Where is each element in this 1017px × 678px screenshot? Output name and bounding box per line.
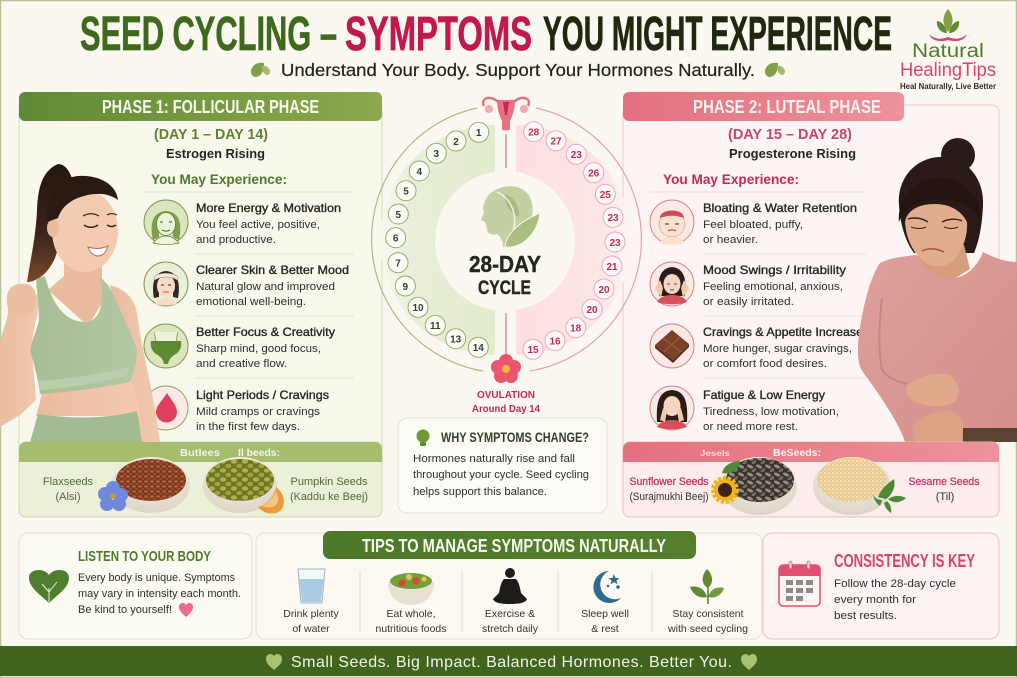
day circles: follicular: 10 bbox=[412, 303, 424, 314]
footer banner bbox=[0, 646, 1017, 676]
symptom: better focus: Sharp mind, good focus, bbox=[196, 343, 321, 355]
panel: why symptoms change: helps support this balance. bbox=[413, 486, 547, 498]
logo: Natural Healing Tips: HealingTips bbox=[900, 60, 996, 81]
sweater arm fold bbox=[879, 298, 908, 384]
panel: why symptoms change bbox=[398, 418, 607, 513]
ovulation flower bbox=[491, 354, 521, 383]
phase 1 header bbox=[19, 92, 382, 121]
day circles: luteal: 20 bbox=[586, 305, 598, 316]
panel: sunflower and sesame seeds: (Surajmukhi Beej) bbox=[630, 491, 708, 503]
symptom: better focus bbox=[144, 324, 335, 370]
illustration: woman holding stomach bbox=[858, 138, 1017, 442]
day circles: luteal: 21 bbox=[606, 262, 618, 273]
tip: sleep bbox=[581, 571, 629, 635]
tip: yoga bbox=[482, 568, 539, 635]
torso bbox=[36, 380, 141, 416]
panel: consistency is key: best results. bbox=[834, 610, 897, 622]
illustration: woman with raised fist bbox=[0, 164, 160, 442]
symptom: cravings chocolate bbox=[650, 324, 863, 370]
panel: listen to your body: LISTEN TO YOUR BODY bbox=[78, 548, 211, 565]
day range: (DAY 1 – DAY 14) bbox=[154, 126, 268, 143]
icon: light bulb bbox=[416, 430, 430, 446]
seeds section: Il beeds: bbox=[238, 448, 280, 459]
seeds section: (Kaddu ke Beej) bbox=[290, 491, 368, 503]
day circles: follicular: 7 bbox=[395, 258, 401, 270]
tip: food: Eat whole, bbox=[386, 608, 436, 620]
day circles: luteal: 23 bbox=[609, 238, 621, 249]
day circles: luteal: 23 bbox=[607, 213, 619, 224]
symptom: fatigue: Fatigue & Low Energy bbox=[703, 388, 825, 402]
symptom: cravings chocolate: More hunger, sugar cravings, bbox=[703, 343, 852, 355]
symptom: cravings chocolate: or comfort food desires. bbox=[703, 358, 827, 370]
panel: phase 2 luteal bbox=[623, 92, 999, 517]
seeds section: (Alsi) bbox=[55, 491, 81, 503]
day circles: follicular: 5 bbox=[396, 210, 402, 221]
logo: Natural Healing Tips bbox=[900, 9, 996, 91]
day circles: luteal: 23 bbox=[571, 150, 582, 161]
day circles: luteal: 27 bbox=[550, 136, 562, 148]
tips header bbox=[323, 531, 696, 559]
symptom: bloating: Bloating & Water Retention bbox=[703, 201, 857, 215]
seeds section: Butlees bbox=[180, 448, 220, 459]
symptom: fatigue: Tiredness, low motivation, bbox=[703, 406, 839, 418]
icon: pink heart bbox=[179, 603, 193, 617]
panel: why symptoms change: Hormones naturally rise and fall bbox=[413, 453, 575, 465]
uterus icon bbox=[483, 98, 529, 130]
panel: phase 1 follicular bbox=[19, 92, 382, 517]
tip: plant bbox=[667, 569, 748, 635]
panel: listen to your body: may vary in intensity each month. bbox=[78, 588, 241, 600]
tip: sleep: & rest bbox=[591, 623, 619, 635]
day circles: follicular: 9 bbox=[403, 282, 409, 293]
cycle label: 28-DAY bbox=[469, 251, 541, 277]
symptom: better focus: and creative flow. bbox=[196, 358, 287, 370]
phase 2 header bbox=[623, 92, 904, 121]
day circles: follicular: 11 bbox=[430, 321, 441, 332]
day circles: luteal bbox=[523, 122, 625, 359]
day circles: follicular: 14 bbox=[473, 343, 484, 354]
tip: yoga: Exercise & bbox=[485, 608, 535, 620]
chest and neck bbox=[48, 258, 110, 326]
tip: plant: Stay consistent bbox=[672, 608, 744, 620]
panel: why symptoms change: WHY SYMPTOMS CHANGE? bbox=[441, 429, 589, 445]
hair bbox=[47, 176, 118, 222]
seeds section: Flaxseeds bbox=[43, 476, 94, 488]
you may experience: You May Experience: bbox=[151, 171, 287, 187]
bowl: pumpkin seeds bbox=[203, 457, 284, 514]
ponytail bbox=[27, 164, 75, 282]
phase 1 header: PHASE 1: FOLLICULAR PHASE bbox=[102, 97, 319, 117]
day circles: luteal: 20 bbox=[598, 285, 610, 296]
smile and eyes bbox=[83, 214, 117, 227]
tip: food: nutritious foods bbox=[376, 623, 446, 635]
panel: listen to your body bbox=[19, 533, 252, 639]
panel: sunflower and sesame seeds: BeSeeds: bbox=[773, 448, 821, 459]
day circles: follicular: 5 bbox=[403, 186, 409, 198]
bun bbox=[941, 138, 975, 172]
ovulation label: Around Day 14 bbox=[472, 404, 540, 415]
panel: listen to your body: Every body is unique. Symptoms bbox=[78, 572, 235, 584]
symptom: mood swings: or easily irritated. bbox=[703, 296, 794, 308]
panel: tips to manage symptoms naturally bbox=[256, 531, 762, 639]
hormone label: Progesterone Rising bbox=[729, 147, 856, 161]
symptom: bloating: or heavier. bbox=[703, 234, 758, 246]
symptom: mood swings: Feeling emotional, anxious, bbox=[703, 281, 843, 293]
centre disc bbox=[435, 171, 575, 311]
symptom: more energy: and productive. bbox=[196, 234, 276, 246]
symptom: more energy bbox=[144, 200, 341, 246]
front hair bbox=[899, 178, 981, 222]
day circles: luteal: 28 bbox=[528, 128, 540, 138]
subtitle with leaf icons: Understand Your Body. Support Your Hormones Naturally. bbox=[281, 60, 755, 80]
day circles: luteal: 16 bbox=[549, 336, 561, 348]
day circles: luteal: 26 bbox=[588, 168, 600, 180]
seeds section bbox=[19, 442, 382, 517]
cycle label: CYCLE bbox=[478, 278, 531, 299]
symptom: light periods: Light Periods / Cravings bbox=[196, 388, 329, 402]
panel background bbox=[623, 105, 999, 517]
title: SYMPTOMS bbox=[345, 8, 532, 61]
panel: listen to your body: Be kind to yourself! bbox=[78, 604, 172, 616]
symptom: clearer skin: emotional well-being. bbox=[196, 296, 306, 308]
you may experience: You May Experience: bbox=[663, 171, 799, 187]
panel: sunflower and sesame seeds: Sesame Seeds bbox=[908, 476, 980, 488]
tip: water bbox=[283, 569, 339, 635]
frowning features bbox=[908, 218, 962, 252]
day circles: follicular: 13 bbox=[450, 334, 462, 346]
symptom: fatigue bbox=[650, 386, 839, 433]
tip: sleep: Sleep well bbox=[581, 608, 629, 620]
day circles: luteal: 25 bbox=[600, 190, 611, 201]
face bbox=[905, 204, 967, 266]
sweater body bbox=[858, 252, 1017, 442]
pants bbox=[963, 428, 1017, 442]
tip: water: of water bbox=[292, 623, 330, 635]
ovulation label bbox=[472, 390, 540, 415]
symptom: fatigue: or need more rest. bbox=[703, 421, 798, 433]
panel: sunflower and sesame seeds bbox=[623, 442, 999, 517]
ovulation label: OVULATION bbox=[477, 390, 535, 401]
panel: sunflower and sesame seeds: Sunflower Seeds bbox=[630, 476, 709, 488]
tip: plant: with seed cycling bbox=[667, 623, 748, 635]
day circles: luteal: 18 bbox=[570, 324, 582, 334]
panel: consistency is key: Follow the 28-day cycle bbox=[834, 578, 956, 590]
day circles: follicular: 3 bbox=[434, 149, 440, 160]
bowl: sunflower seeds bbox=[714, 457, 797, 515]
hair back bbox=[899, 157, 983, 253]
day circles: follicular: 1 bbox=[476, 128, 482, 139]
tips header: TIPS TO MANAGE SYMPTOMS NATURALLY bbox=[362, 536, 666, 556]
coloured bands bbox=[380, 125, 495, 355]
outer arcs bbox=[372, 108, 483, 371]
title bbox=[80, 8, 892, 61]
head and leaf emblem bbox=[481, 186, 540, 247]
sports top bbox=[30, 276, 137, 394]
title: SEED CYCLING – bbox=[80, 8, 337, 61]
symptom: clearer skin: Clearer Skin & Better Mood bbox=[196, 263, 349, 277]
panel: why symptoms change: throughout your cycle. Seed cycling bbox=[413, 469, 589, 481]
symptom: more energy: You feel active, positive, bbox=[196, 219, 320, 231]
panel: consistency is key bbox=[763, 533, 999, 639]
day range: (DAY 15 – DAY 28) bbox=[728, 126, 852, 143]
symptom: light periods: Mild cramps or cravings bbox=[196, 406, 321, 418]
tip: water: Drink plenty bbox=[283, 608, 339, 620]
face bbox=[52, 190, 118, 272]
seeds section: Pumpkin Seeds bbox=[290, 476, 368, 488]
bowl: sesame seeds bbox=[813, 457, 906, 515]
panel background bbox=[19, 100, 382, 517]
symptom: mood swings bbox=[650, 262, 846, 308]
symptom: clearer skin bbox=[144, 262, 349, 308]
tip: food bbox=[376, 573, 446, 635]
symptom: light periods: in the first few days. bbox=[196, 421, 300, 433]
left arm and fist bbox=[0, 290, 40, 427]
symptom: mood swings: Mood Swings / Irritability bbox=[703, 263, 846, 277]
tip: yoga: stretch daily bbox=[482, 623, 539, 635]
symptom: better focus: Better Focus & Creativity bbox=[196, 325, 335, 339]
day circles: follicular: 4 bbox=[417, 167, 423, 178]
phase 2 header: PHASE 2: LUTEAL PHASE bbox=[693, 97, 881, 117]
panel: sunflower and sesame seeds: Jesels bbox=[700, 449, 731, 458]
leggings bbox=[30, 411, 142, 442]
symptom: bloating bbox=[650, 200, 857, 246]
neck bbox=[918, 245, 970, 285]
symptom: cravings chocolate: Cravings & Appetite Increase bbox=[703, 325, 863, 339]
symptom: light periods bbox=[144, 386, 329, 433]
cycle wheel bbox=[372, 98, 641, 415]
day circles: follicular bbox=[386, 122, 489, 357]
logo: Natural Healing Tips: Natural bbox=[912, 41, 984, 62]
panel: sunflower and sesame seeds: (Til) bbox=[936, 491, 954, 503]
symptom: clearer skin: Natural glow and improved bbox=[196, 281, 335, 293]
day circles: follicular: 2 bbox=[453, 137, 459, 148]
symptom: more energy: More Energy & Motivation bbox=[196, 201, 341, 215]
icon: calendar bbox=[779, 561, 820, 606]
footer banner: Small Seeds. Big Impact. Balanced Hormones. Better You. bbox=[291, 654, 732, 671]
hormone label: Estrogen Rising bbox=[166, 147, 265, 161]
right arm bbox=[110, 285, 160, 442]
hands on stomach bbox=[906, 374, 959, 406]
panel: consistency is key: every month for bbox=[834, 594, 916, 606]
bowl: flaxseeds bbox=[98, 457, 190, 513]
logo: Natural Healing Tips: Heal Naturally, Live Better bbox=[900, 82, 996, 91]
day circles: follicular: 6 bbox=[393, 234, 399, 244]
icon: leaf heart bbox=[29, 570, 69, 603]
symptom: bloating: Feel bloated, puffy, bbox=[703, 219, 803, 231]
day circles: luteal: 15 bbox=[527, 345, 539, 356]
cycle label bbox=[469, 251, 541, 299]
divider lines bbox=[505, 134, 507, 355]
